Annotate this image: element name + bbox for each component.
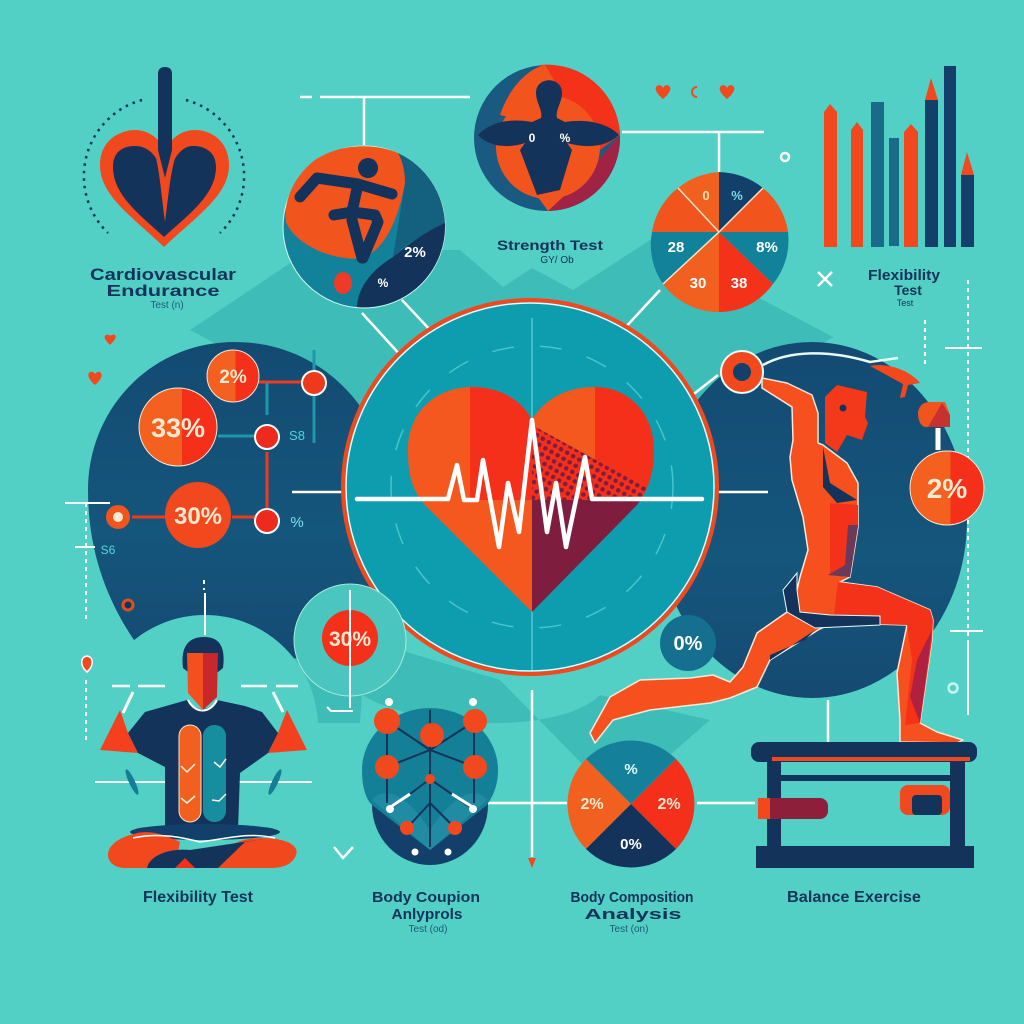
badge: 33% bbox=[139, 388, 217, 466]
pie chart: top right: 0 bbox=[702, 188, 710, 203]
heading: flexibility test top bbox=[868, 267, 941, 308]
icon: pin marker bbox=[82, 656, 92, 672]
panel: lower left arch bbox=[92, 615, 318, 841]
heading: body composition analysis right bbox=[570, 889, 694, 935]
icon: strength torso circle bbox=[474, 65, 620, 211]
heading: body composition analysis left: Body Coupion bbox=[372, 889, 480, 906]
heading: flexibility test top: Flexibility bbox=[868, 267, 941, 284]
heading: body composition analysis right: Test (on) bbox=[610, 924, 648, 935]
icon: running figure circle bbox=[283, 146, 445, 308]
heading: body composition analysis left: Test (od) bbox=[409, 924, 447, 935]
pie chart: top right: 8% bbox=[756, 239, 778, 256]
chart: left blob nodes: S6 bbox=[101, 543, 116, 557]
heart rate line bbox=[357, 420, 702, 547]
heading: cardiovascular endurance bbox=[90, 265, 236, 311]
heading: body composition analysis right: Body Composition bbox=[570, 889, 694, 906]
heading: flexibility test top: Test bbox=[897, 298, 914, 308]
icon: ring marker bbox=[781, 153, 789, 161]
badge: 30% bbox=[294, 584, 406, 711]
icon: small hearts bbox=[88, 85, 734, 385]
badge: 2% bbox=[207, 350, 259, 402]
pie chart: bottom: 0% bbox=[620, 836, 642, 853]
bar chart: top right bbox=[824, 66, 974, 247]
badge: 30%: 30% bbox=[329, 628, 371, 651]
panel: dark left blob bbox=[88, 342, 372, 660]
chart: left blob nodes bbox=[101, 350, 326, 610]
badge: 30%: 30% bbox=[174, 503, 222, 530]
heading: body composition analysis left: Anlyprols bbox=[392, 906, 462, 923]
pie chart: top right bbox=[651, 172, 789, 312]
heading: flexibility test top: Test bbox=[894, 282, 922, 298]
heading: body composition analysis right: Analysis bbox=[584, 906, 682, 923]
badge: 30% bbox=[165, 482, 231, 548]
icon: check mark bbox=[334, 847, 353, 858]
pie chart: top right: % bbox=[731, 188, 743, 203]
heading: cardiovascular endurance: Cardiovascular bbox=[90, 265, 236, 284]
badge: 0% bbox=[660, 615, 716, 671]
icon: cardio heart with arrow bbox=[84, 67, 244, 247]
icon: strength torso circle: % bbox=[560, 131, 571, 145]
icon: cross mark bbox=[818, 272, 832, 286]
icon: molecule network bbox=[362, 698, 498, 865]
icon: small ring bbox=[948, 684, 958, 692]
icon: marker tip bbox=[528, 858, 536, 868]
heading: cardiovascular endurance: Test (n) bbox=[150, 300, 184, 311]
heading: strength test: Strength Test bbox=[497, 237, 603, 253]
pie chart: top right: 30 bbox=[690, 275, 706, 292]
badge: 33%: 33% bbox=[151, 413, 205, 443]
chart: left blob nodes: S8 bbox=[289, 428, 305, 443]
badge: 2%: 2% bbox=[927, 473, 967, 504]
pie chart: bottom bbox=[568, 741, 694, 867]
heading: strength test bbox=[497, 237, 603, 266]
heading: body composition analysis left bbox=[372, 889, 480, 935]
badge: 2% bbox=[910, 402, 984, 525]
pie chart: bottom: % bbox=[624, 761, 638, 778]
badge: 2%: 2% bbox=[219, 367, 247, 388]
heading: flexibility test bottom: Flexibility Test bbox=[143, 889, 254, 906]
pie chart: bottom: 2% bbox=[657, 796, 681, 813]
background hills bbox=[190, 240, 833, 772]
pie chart: bottom: 2% bbox=[580, 796, 604, 813]
connector lines bbox=[65, 97, 983, 857]
icon: running figure circle: 2% bbox=[404, 244, 426, 261]
chart: left blob nodes: % bbox=[290, 514, 304, 531]
pie chart: top right: 38 bbox=[731, 275, 747, 292]
icon: lunging athlete bbox=[590, 351, 963, 743]
icon: running figure circle: % bbox=[378, 276, 389, 290]
heading: cardiovascular endurance: Endurance bbox=[106, 283, 220, 300]
panel: central heart circle bbox=[343, 300, 717, 674]
pie chart: top right: 28 bbox=[668, 239, 684, 256]
badge: 0%: 0% bbox=[674, 633, 703, 655]
panel: dark right blob bbox=[657, 342, 967, 698]
heading: balance exercise: Balance Exercise bbox=[787, 889, 921, 906]
icon: seated figure bbox=[100, 637, 307, 868]
icon: balance bench bbox=[751, 742, 977, 868]
heading: strength test: GY/ Ob bbox=[540, 255, 574, 266]
icon: strength torso circle: 0 bbox=[529, 131, 536, 145]
icon: central heart bbox=[408, 387, 654, 612]
